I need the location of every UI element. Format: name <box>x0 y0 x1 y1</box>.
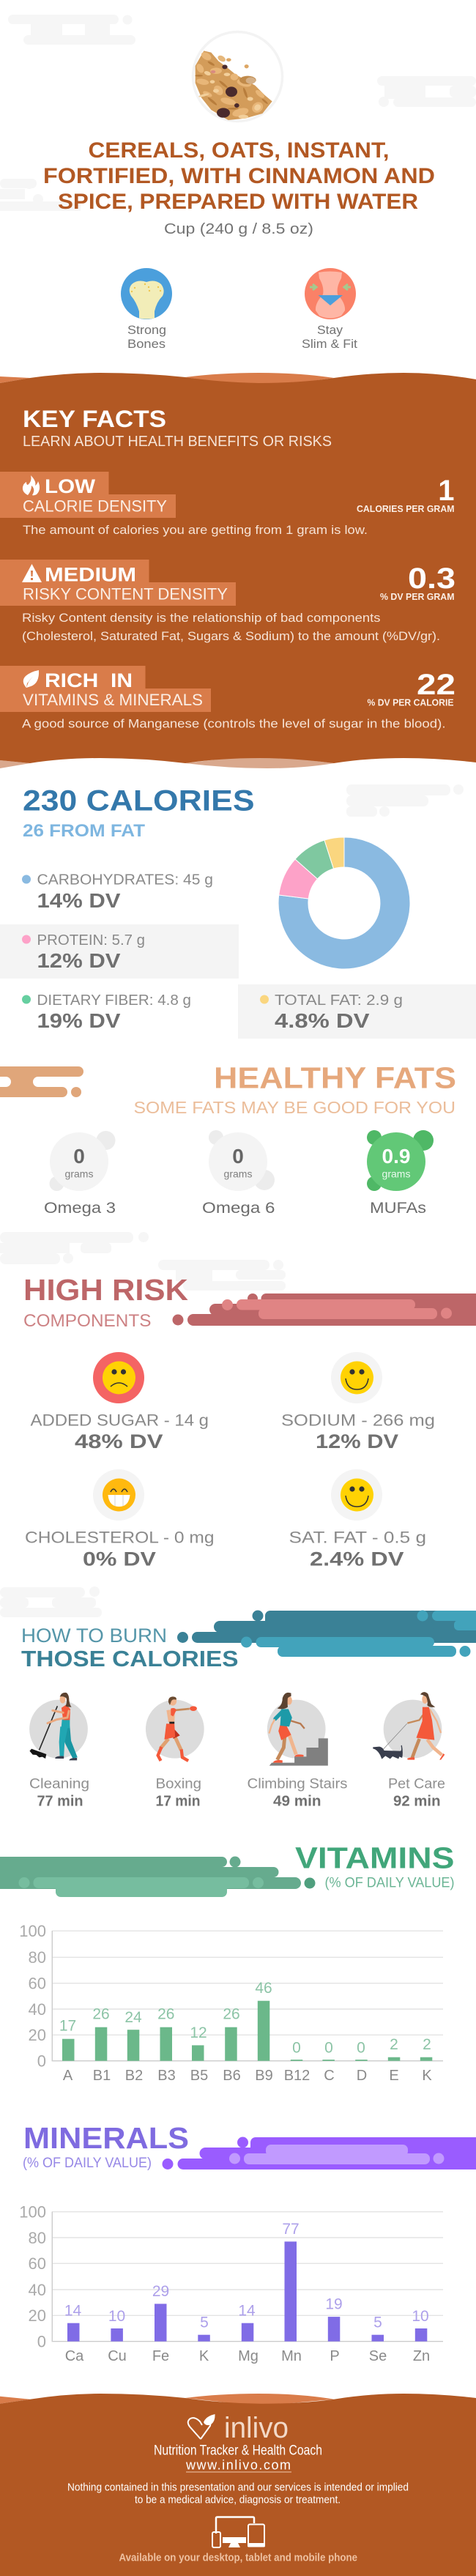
bar chart: vitamins: A <box>63 2068 73 2084</box>
activity: climbing stairs: 49 min <box>273 1793 321 1809</box>
decorative banner: healthy fats <box>0 1066 83 1097</box>
bar chart: minerals: K <box>199 2348 209 2364</box>
fat: omega 3: grams <box>65 1168 93 1179</box>
bar chart: minerals: 80 <box>29 2229 46 2247</box>
legend: carbohydrates: 14% DV <box>37 889 121 912</box>
bar chart: minerals: 5 <box>200 2315 209 2331</box>
bar chart: minerals <box>19 2203 443 2364</box>
fact: medium risky content density: Risky Content density is the relationship of bad components <box>22 611 381 625</box>
activity: climbing stairs <box>248 1693 347 1809</box>
bar chart: minerals: Ca <box>65 2348 84 2364</box>
bar chart: vitamins: B9 <box>255 2068 273 2084</box>
component: saturated fat: 2.4% DV <box>310 1548 404 1570</box>
bar chart: vitamins: 60 <box>29 1975 46 1992</box>
fact: low calorie density: LOW <box>45 475 96 497</box>
heading: healthy fats: HEALTHY FATS <box>214 1061 456 1094</box>
bar chart: minerals: Zn <box>413 2348 430 2364</box>
heading: vitamins: VITAMINS <box>295 1841 454 1875</box>
activity: pet care <box>373 1692 445 1809</box>
tagline: Nutrition Tracker & Health Coach <box>154 2443 322 2458</box>
bar chart: vitamins: 2 <box>390 2036 398 2053</box>
icon: warning triangle <box>22 564 42 582</box>
subheading: minerals daily value: (% OF DAILY VALUE) <box>23 2156 152 2171</box>
fact: rich in vitamins and minerals: A good source of Manganese (controls the level of sugar in the blood). <box>22 716 445 731</box>
heading: minerals: MINERALS <box>23 2121 189 2155</box>
subheading: from fat: 26 FROM FAT <box>23 821 145 841</box>
component: sodium <box>281 1352 435 1452</box>
bar chart: vitamins: 17 <box>59 2018 76 2035</box>
donut chart: macronutrients <box>278 837 410 969</box>
icon: stay slim <box>305 268 356 319</box>
title: FORTIFIED, WITH CINNAMON AND <box>43 164 435 188</box>
bar chart: vitamins: 0 <box>324 2040 333 2057</box>
fact: rich in vitamins and minerals: RICH IN <box>45 669 133 691</box>
heading: those calories: THOSE CALORIES <box>21 1646 239 1671</box>
bar chart: vitamins: 2 <box>423 2036 431 2053</box>
bar chart: minerals: P <box>330 2348 340 2364</box>
icon: leaf <box>23 670 39 688</box>
bar chart: minerals: 0 <box>37 2332 46 2351</box>
bar chart: vitamins: 26 <box>223 2006 240 2023</box>
icon: devices <box>212 2517 265 2547</box>
title: CEREALS, OATS, INSTANT, <box>88 138 390 163</box>
component: cholesterol: 0% DV <box>83 1548 156 1570</box>
bar chart: vitamins: 26 <box>92 2006 110 2023</box>
bar chart: minerals: 29 <box>152 2283 169 2300</box>
bar chart: vitamins: 12 <box>190 2024 207 2041</box>
bar chart: vitamins: 0 <box>292 2040 301 2057</box>
bar chart: minerals: Mg <box>238 2348 259 2364</box>
availability note: Available on your desktop, tablet and mobile phone <box>119 2552 357 2564</box>
activity: boxing <box>146 1696 204 1809</box>
decorative banner: vitamins <box>0 1856 315 1897</box>
panel: key facts <box>0 373 476 768</box>
heading: high risk: HIGH RISK <box>23 1273 188 1307</box>
legend: protein: PROTEIN: 5.7 g <box>37 932 145 949</box>
legend: carbohydrates: CARBOHYDRATES: 45 g <box>37 872 213 888</box>
bar chart: vitamins: B12 <box>284 2068 310 2084</box>
component: sodium: SODIUM - 266 mg <box>281 1411 435 1430</box>
bar chart: vitamins: B6 <box>223 2068 241 2084</box>
fact: low calorie density: CALORIES PER GRAM <box>357 503 454 514</box>
logo wordmark: inlivo <box>224 2412 289 2444</box>
bar chart: minerals: 77 <box>282 2221 300 2238</box>
fact: medium risky content density: (Cholesterol, Saturated Fat, Sugars & Sodium) to the amount (%DV/gr). <box>22 629 440 643</box>
bar chart: vitamins: 0 <box>357 2040 365 2057</box>
activity: pet care: 92 min <box>393 1793 441 1809</box>
fat: MUFAs: MUFAs <box>370 1200 426 1217</box>
bar chart: vitamins: C <box>324 2068 335 2084</box>
bar chart: minerals: 10 <box>108 2308 125 2325</box>
fact: rich in vitamins and minerals: 22 <box>417 669 455 701</box>
fact: low calorie density <box>0 472 454 537</box>
component: cholesterol <box>25 1469 214 1570</box>
logo: heart with leaf <box>188 2414 215 2439</box>
bar chart: vitamins: 26 <box>157 2006 174 2023</box>
fat: MUFAs <box>367 1130 434 1217</box>
raisins <box>217 64 239 118</box>
fact: medium risky content density: % DV PER GRAM <box>380 591 454 602</box>
bar chart: vitamins: B5 <box>190 2068 208 2084</box>
fact: medium risky content density: 0.3 <box>408 563 455 595</box>
bar chart: minerals: 60 <box>29 2254 46 2273</box>
legend: protein: 12% DV <box>37 949 121 972</box>
disclaimer: to be a medical advice, diagnosis or treatment. <box>135 2493 341 2506</box>
fat: omega 6: grams <box>224 1168 252 1179</box>
fat: omega 6: Omega 6 <box>202 1200 275 1217</box>
legend: total fat <box>238 984 476 1039</box>
bar chart: minerals: 19 <box>325 2295 343 2313</box>
bar chart: vitamins: 100 <box>19 1922 46 1940</box>
legend: total fat: 4.8% DV <box>275 1009 370 1032</box>
food photo: granola in circle <box>193 32 283 122</box>
legend: dietary fiber: 19% DV <box>37 1009 121 1032</box>
activity: boxing: 17 min <box>155 1793 201 1809</box>
legend: carbohydrates <box>22 872 213 912</box>
subheading: vitamins daily value: (% OF DAILY VALUE) <box>325 1875 454 1891</box>
bar chart: vitamins <box>19 1922 443 2084</box>
bar chart: minerals: 20 <box>29 2306 46 2325</box>
heading: calories: 230 CALORIES <box>23 785 255 817</box>
label: strong bones <box>127 323 166 351</box>
legend: protein <box>0 924 239 979</box>
bar chart: vitamins: 20 <box>29 2026 46 2044</box>
legend: total fat: TOTAL FAT: 2.9 g <box>275 992 403 1009</box>
fat: omega 3: Omega 3 <box>44 1200 116 1217</box>
website: www.inlivo.com <box>185 2458 291 2473</box>
disclaimer: Nothing contained in this presentation and our services is intended or implied <box>67 2482 409 2493</box>
bar chart: minerals: 10 <box>412 2308 429 2325</box>
bar chart: vitamins: 80 <box>29 1948 46 1967</box>
label: stay slim <box>302 323 357 351</box>
heading: how to burn: HOW TO BURN <box>21 1625 167 1647</box>
legend: dietary fiber <box>22 992 191 1032</box>
component: saturated fat <box>289 1469 426 1570</box>
component: added sugar: ADDED SUGAR - 14 g <box>31 1411 209 1430</box>
bar chart: vitamins: B1 <box>93 2068 111 2084</box>
fat: omega 6: 0 <box>232 1145 244 1168</box>
label: stay slim: Stay <box>317 323 343 337</box>
title: SPICE, PREPARED WITH WATER <box>58 190 418 214</box>
fact: medium risky content density: RISKY CONTENT DENSITY <box>23 584 228 604</box>
panel: footer <box>0 2394 476 2576</box>
bar chart: minerals: Se <box>369 2348 387 2364</box>
title <box>43 138 435 214</box>
bar chart: vitamins: E <box>389 2068 399 2084</box>
fact: low calorie density: 1 <box>438 475 454 507</box>
bar chart: vitamins: B2 <box>125 2068 143 2084</box>
label: strong bones: Bones <box>127 337 166 351</box>
bar chart: minerals: Cu <box>108 2348 127 2364</box>
fact: low calorie density: CALORIE DENSITY <box>23 497 167 516</box>
bar chart: vitamins: B3 <box>157 2068 176 2084</box>
icon: flame <box>23 475 40 495</box>
fat: omega 3 <box>44 1131 116 1217</box>
decorative banner: high risk <box>173 1293 476 1326</box>
component: added sugar: 48% DV <box>75 1430 163 1452</box>
component: saturated fat: SAT. FAT - 0.5 g <box>289 1528 426 1547</box>
fat: MUFAs: grams <box>382 1168 410 1179</box>
label: stay slim: Slim & Fit <box>302 337 357 351</box>
bar chart: minerals: Mn <box>281 2348 302 2364</box>
fat: omega 6 <box>202 1130 275 1217</box>
activity: cleaning <box>29 1693 89 1809</box>
component: added sugar <box>31 1352 209 1452</box>
component: cholesterol: CHOLESTEROL - 0 mg <box>25 1528 214 1547</box>
activity: climbing stairs: Climbing Stairs <box>248 1777 347 1792</box>
bar chart: vitamins: 0 <box>37 2052 46 2070</box>
icon: strong bones <box>121 268 172 319</box>
heading: key facts: KEY FACTS <box>23 406 166 432</box>
activity: cleaning: Cleaning <box>29 1777 89 1792</box>
fact: medium risky content density <box>0 560 455 643</box>
fat: MUFAs: 0.9 <box>382 1145 410 1168</box>
label: strong bones: Strong <box>127 323 166 337</box>
bar chart: vitamins: D <box>357 2068 367 2084</box>
disclaimer <box>67 2482 409 2506</box>
activity: boxing: Boxing <box>155 1777 201 1792</box>
decorative banner: burn calories <box>177 1610 476 1657</box>
bar chart: vitamins: 46 <box>255 1980 272 1997</box>
bar chart: minerals: 14 <box>238 2303 256 2320</box>
decorative banner: minerals <box>163 2137 476 2169</box>
fat: omega 3: 0 <box>73 1145 85 1168</box>
legend: dietary fiber: DIETARY FIBER: 4.8 g <box>37 992 191 1009</box>
fact: rich in vitamins and minerals <box>0 666 455 731</box>
activity: cleaning: 77 min <box>37 1793 83 1809</box>
activity: pet care: Pet Care <box>388 1777 445 1792</box>
fact: rich in vitamins and minerals: % DV PER CALORIE <box>368 697 454 708</box>
fact: rich in vitamins and minerals: VITAMINS & MINERALS <box>23 691 203 709</box>
subheading: LEARN ABOUT HEALTH BENEFITS OR RISKS <box>23 434 332 450</box>
fact: low calorie density: The amount of calories you are getting from 1 gram is low. <box>23 523 368 537</box>
bar chart: vitamins: K <box>422 2068 432 2084</box>
bar chart: minerals: 40 <box>29 2281 46 2299</box>
subheading: healthy fats: SOME FATS MAY BE GOOD FOR YOU <box>133 1098 455 1117</box>
bar chart: minerals: 5 <box>373 2315 382 2331</box>
component: sodium: 12% DV <box>316 1430 398 1452</box>
fact: medium risky content density: MEDIUM <box>45 564 136 586</box>
subheading: components: COMPONENTS <box>23 1311 151 1331</box>
serving size: Cup (240 g / 8.5 oz) <box>164 221 313 237</box>
bar chart: vitamins: 24 <box>124 2009 142 2026</box>
bar chart: minerals: 14 <box>64 2303 81 2320</box>
bar chart: minerals: Fe <box>152 2348 169 2364</box>
bar chart: minerals: 100 <box>19 2203 46 2221</box>
bar chart: vitamins: 40 <box>29 2000 46 2019</box>
